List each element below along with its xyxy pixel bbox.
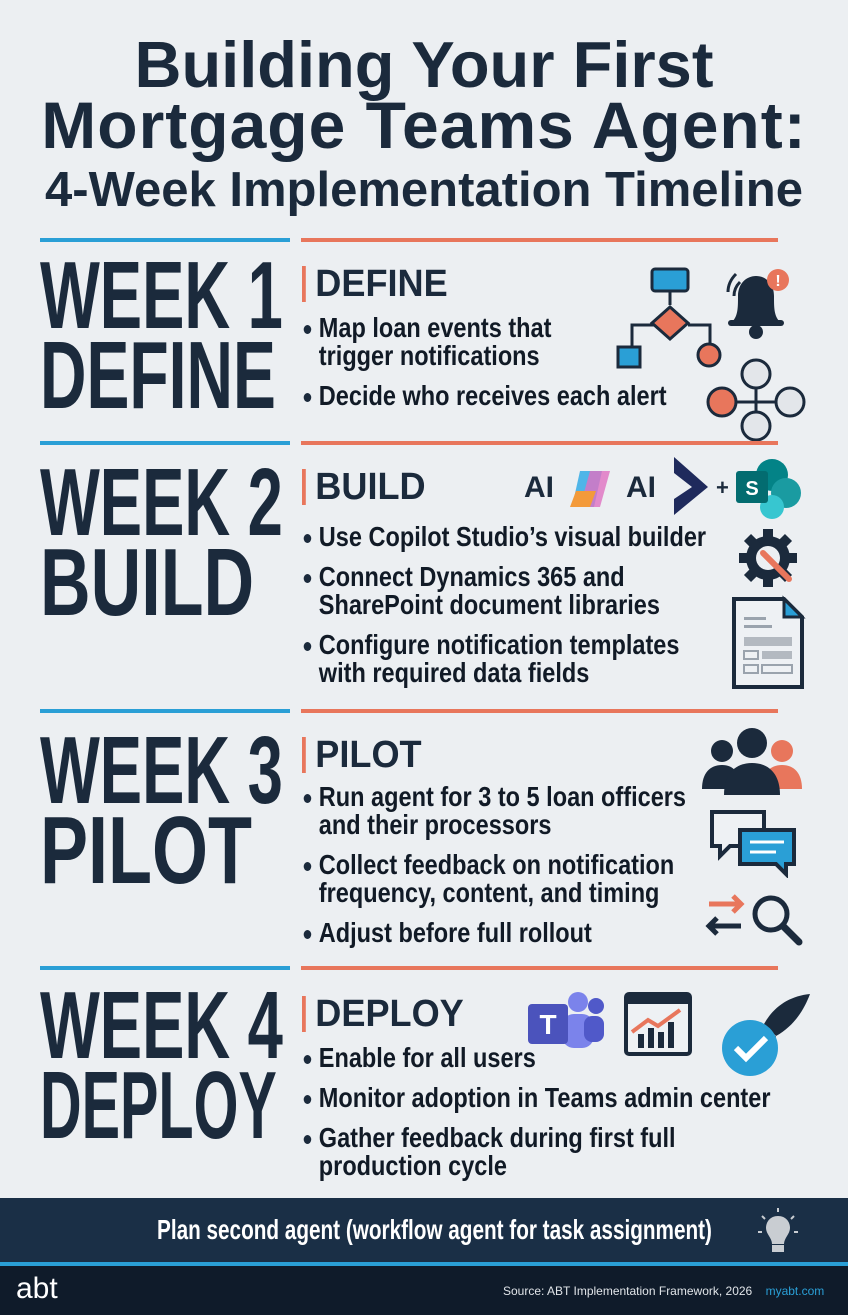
bullets week 1	[304, 312, 667, 411]
panel: week 2	[40, 449, 806, 689]
icon: teams logo	[528, 992, 604, 1048]
icon: swap search	[706, 894, 802, 946]
bullets week 2: SharePoint document libraries	[319, 589, 660, 620]
icon: people network	[706, 358, 806, 441]
week 1 label	[40, 242, 283, 429]
heading: pilot: PILOT	[315, 734, 422, 776]
logos row: AI	[524, 471, 554, 504]
logos row: +	[716, 475, 729, 500]
title: 4-Week Implementation Timeline	[45, 163, 803, 217]
week 4 label	[40, 972, 283, 1159]
week 3 label: PILOT	[40, 797, 252, 904]
week 4 label: DEPLOY	[40, 1052, 277, 1159]
logos row: S	[745, 478, 759, 500]
icon: bell: !	[775, 273, 781, 290]
bullets week 2: Use Copilot Studio’s visual builder	[319, 521, 706, 552]
footer bar	[0, 1266, 848, 1315]
icon: chat	[710, 810, 796, 878]
bullets week 4: Gather feedback during first full	[319, 1122, 676, 1153]
bullets week 4: production cycle	[319, 1150, 507, 1181]
bullets week 2: Connect Dynamics 365 and	[319, 561, 625, 592]
title: Mortgage Teams Agent:	[41, 88, 807, 162]
bullets week 1: Decide who receives each alert	[319, 380, 667, 411]
icon: lightbulb	[758, 1208, 798, 1252]
icon: bell	[726, 269, 789, 339]
bullets week 3	[304, 781, 686, 948]
week 2 label: BUILD	[40, 529, 254, 636]
icon: team	[702, 728, 802, 795]
footer banner: next step	[0, 1198, 848, 1262]
logos row: AI	[626, 471, 656, 504]
panel: week 3	[40, 717, 802, 948]
icon: analytics window	[624, 992, 692, 1056]
bullets week 4: Monitor adoption in Teams admin center	[319, 1082, 771, 1113]
title	[41, 28, 807, 217]
bullets week 2	[304, 521, 706, 688]
logos row	[524, 457, 801, 519]
bullets week 2: Configure notification templates	[319, 629, 679, 660]
logo: abt: abt	[16, 1272, 58, 1305]
heading: deploy: DEPLOY	[315, 993, 464, 1035]
heading: define: DEFINE	[315, 263, 448, 305]
week 1 label: DEFINE	[40, 322, 276, 429]
title: Building Your First	[134, 28, 713, 101]
week 4 label: WEEK 4	[40, 972, 283, 1079]
icon: teams logo: T	[539, 1009, 557, 1040]
footer banner: next step: Plan second agent (workflow agent for task assignment)	[157, 1214, 712, 1245]
bullets week 3: Adjust before full rollout	[319, 917, 592, 948]
bullets week 3: Collect feedback on notification	[319, 849, 674, 880]
week 2 label: WEEK 2	[40, 449, 283, 556]
bullets week 1: Map loan events that	[319, 312, 551, 343]
bullets week 4: Enable for all users	[319, 1042, 536, 1073]
icon: document	[732, 596, 806, 689]
icon: flowchart	[616, 268, 722, 368]
icon: rocket check	[722, 994, 810, 1076]
heading: build: BUILD	[315, 466, 426, 508]
bullets week 3: and their processors	[319, 809, 551, 840]
bullets week 4	[304, 1042, 771, 1181]
bullets week 3: Run agent for 3 to 5 loan officers	[319, 781, 686, 812]
week 3 label: WEEK 3	[40, 717, 283, 824]
bullets week 2: with required data fields	[319, 657, 589, 688]
icon: gear wrench	[739, 529, 797, 587]
week 2 label	[40, 449, 283, 636]
week 3 label	[40, 717, 283, 904]
panel: week 1	[40, 242, 806, 441]
panel: week 4	[40, 972, 810, 1181]
bullets week 3: frequency, content, and timing	[319, 877, 659, 908]
source text: Source: ABT Implementation Framework, 2026 myabt.com	[503, 1284, 824, 1298]
bullets week 1: trigger notifications	[319, 340, 540, 371]
week 1 label: WEEK 1	[40, 242, 283, 349]
